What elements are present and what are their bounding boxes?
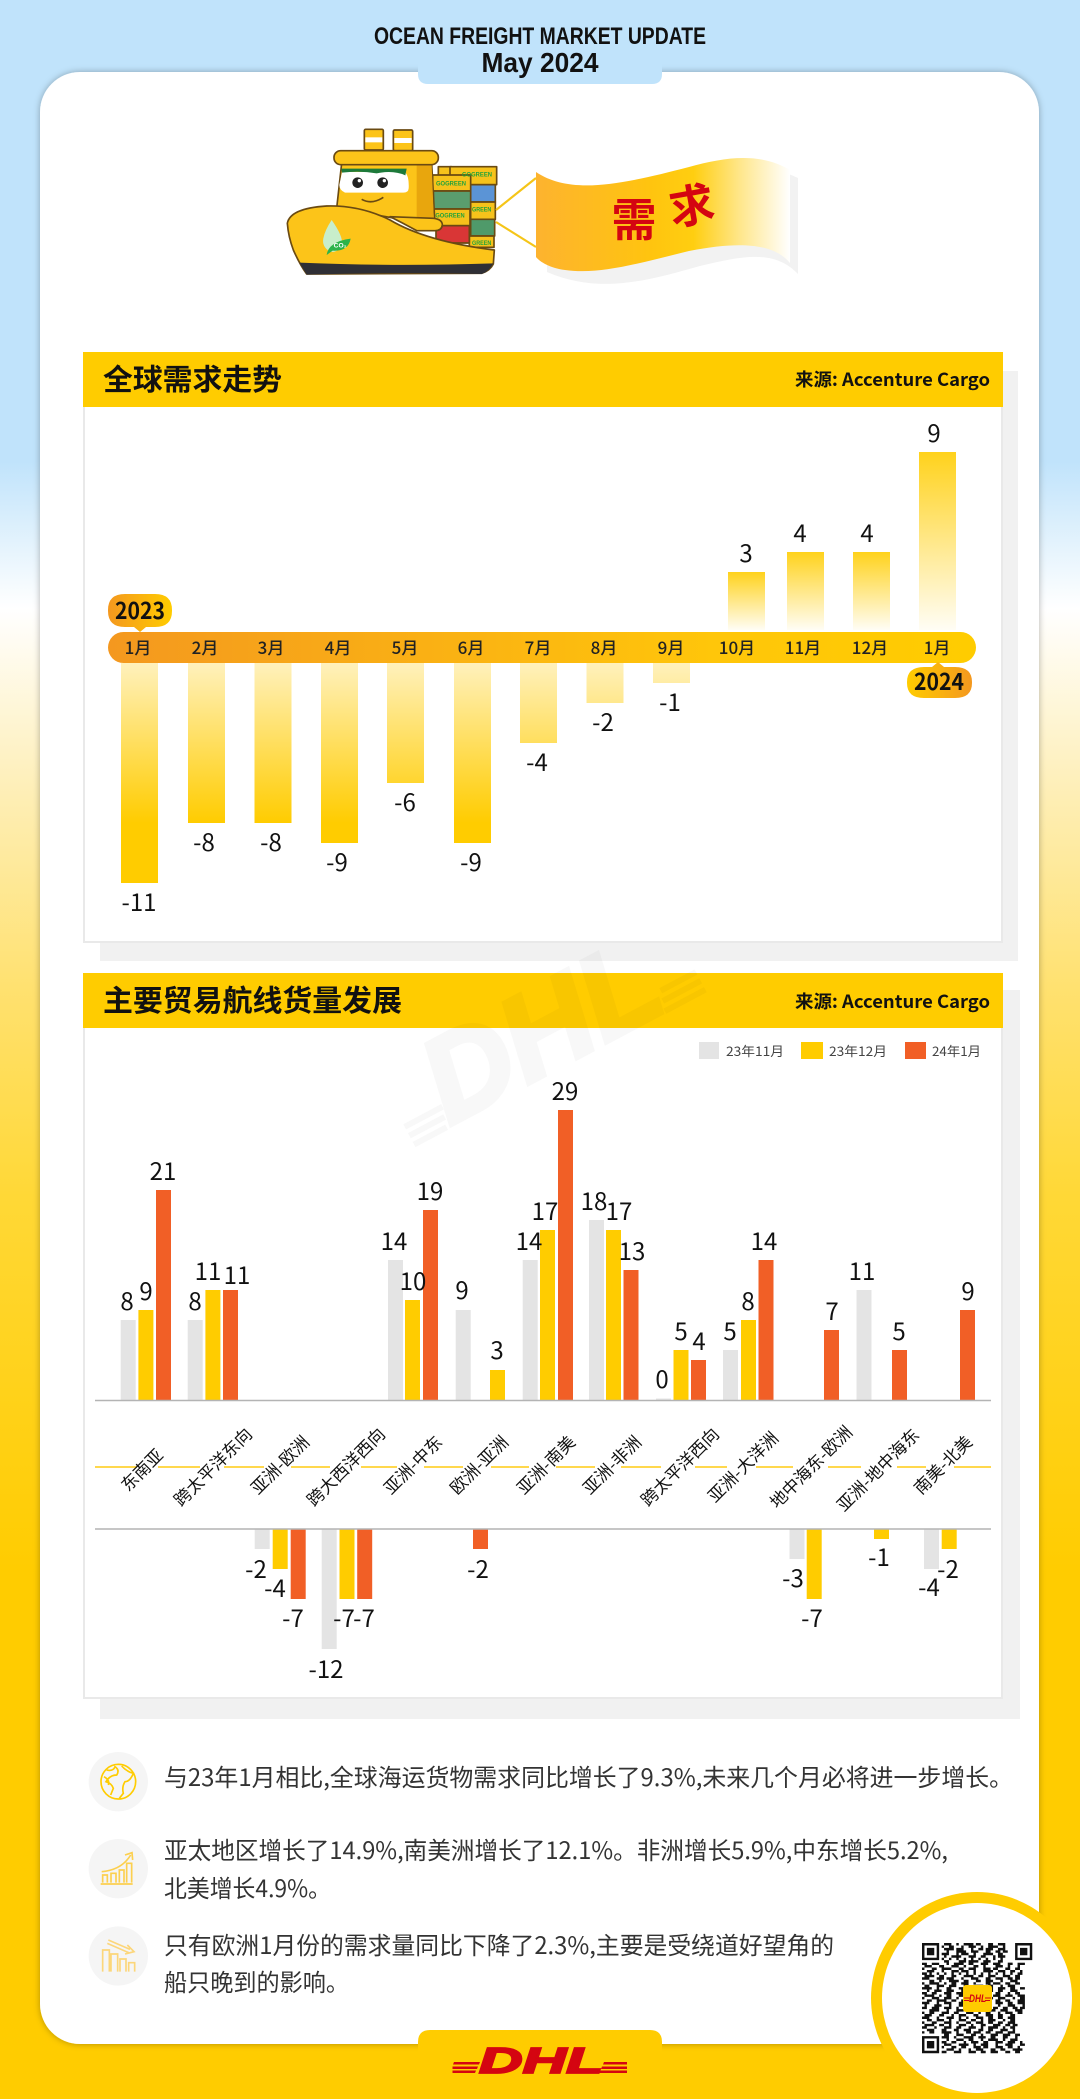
value labels: -2 bbox=[592, 703, 614, 738]
cargo containers: GOGREEN bbox=[462, 172, 492, 179]
pin: 2023: 2023 bbox=[115, 592, 165, 626]
month labels: 6月 bbox=[458, 634, 484, 659]
positive bars bbox=[728, 452, 956, 630]
QR code badge bbox=[871, 1892, 1080, 2099]
ship cabin bbox=[334, 151, 438, 225]
month labels: 10月 bbox=[719, 634, 755, 659]
QR centre logo bbox=[963, 1985, 992, 2012]
value labels: -6 bbox=[394, 783, 416, 818]
cargo containers: GREEN bbox=[472, 207, 491, 214]
value labels: -2 bbox=[937, 1550, 959, 1585]
panel header: 主要贸易航线货量发展 bbox=[103, 978, 402, 1020]
red bars: Jan 2024 bbox=[156, 1110, 975, 1599]
value labels: 9 bbox=[961, 1272, 975, 1307]
month labels: 4月 bbox=[325, 634, 351, 659]
banner text: 需 bbox=[611, 184, 657, 249]
panel header bbox=[83, 352, 1003, 407]
month labels bbox=[125, 634, 950, 659]
DHL logo bbox=[452, 2040, 627, 2081]
ship face bbox=[339, 169, 409, 202]
grey bars: Nov 2023 bbox=[121, 1220, 939, 1649]
panel shadow 1 bbox=[100, 371, 1018, 961]
value labels: 21 bbox=[150, 1152, 176, 1187]
value labels: 10 bbox=[400, 1262, 426, 1297]
value labels: -7 bbox=[353, 1599, 375, 1634]
title bbox=[374, 23, 706, 78]
axis lines bbox=[95, 1400, 991, 1529]
value labels: 11 bbox=[195, 1252, 221, 1287]
value labels: -8 bbox=[193, 823, 215, 858]
finder patterns bbox=[922, 1943, 1032, 2053]
value labels: -7 bbox=[801, 1599, 823, 1634]
panel: trade lane volume development bbox=[83, 894, 1003, 1698]
value labels: -8 bbox=[260, 823, 282, 858]
text block: key takeaways: 北美增长4.9%。 bbox=[164, 1869, 331, 1904]
panel: global demand trend bbox=[83, 352, 1003, 942]
value labels: -4 bbox=[526, 743, 548, 778]
value labels: 5 bbox=[892, 1312, 906, 1347]
category labels: 亚洲-欧洲 bbox=[244, 1429, 314, 1499]
value labels bbox=[120, 1072, 975, 1685]
category labels: 跨大西洋西向 bbox=[300, 1421, 390, 1511]
value labels: 3 bbox=[739, 534, 753, 569]
cargo containers: GOGREEN bbox=[436, 180, 466, 187]
value labels: 8 bbox=[120, 1282, 134, 1317]
legend: 24年1月 bbox=[932, 1041, 981, 1060]
value labels: 14 bbox=[381, 1222, 407, 1257]
value labels: -7 bbox=[333, 1599, 355, 1634]
panel header bbox=[83, 973, 1003, 1028]
text block: key takeaways bbox=[164, 1758, 1013, 1998]
value labels: 13 bbox=[619, 1232, 645, 1267]
text block: key takeaways: 只有欧洲1月份的需求量同比下降了2.3%,主要是受绕道好望角的 bbox=[164, 1926, 834, 1961]
QR code bbox=[922, 1943, 1032, 2053]
cargo containers: GREEN bbox=[472, 240, 491, 247]
value labels: 29 bbox=[552, 1072, 578, 1107]
month labels: 1月 bbox=[924, 634, 950, 659]
value labels: 0 bbox=[655, 1360, 669, 1395]
value labels: -7 bbox=[282, 1599, 304, 1634]
cargo containers bbox=[433, 167, 497, 247]
negative bars bbox=[121, 663, 690, 883]
value labels: 11 bbox=[849, 1252, 875, 1287]
value labels: 8 bbox=[741, 1282, 755, 1317]
month labels: 9月 bbox=[658, 634, 684, 659]
value labels: 5 bbox=[674, 1312, 688, 1347]
icon: rising chart bbox=[89, 1839, 148, 1898]
header tab bbox=[418, 60, 662, 84]
category labels: 亚洲-非洲 bbox=[576, 1429, 646, 1499]
value labels: -1 bbox=[659, 683, 681, 718]
category divider bbox=[95, 1466, 991, 1468]
category labels: 亚洲-中东 bbox=[377, 1429, 447, 1499]
legend: 23年11月 bbox=[726, 1041, 784, 1060]
value labels: 14 bbox=[516, 1222, 542, 1257]
month labels: 3月 bbox=[258, 634, 284, 659]
text block: key takeaways: 与23年1月相比,全球海运货物需求同比增长了9.3%,未来几个月必将进一步增长。 bbox=[164, 1758, 1013, 1793]
value labels: 8 bbox=[188, 1282, 202, 1317]
value labels: 17 bbox=[606, 1192, 632, 1227]
category labels bbox=[114, 1419, 977, 1516]
bar chart: trade lanes bbox=[95, 1072, 991, 1685]
value labels: 3 bbox=[490, 1331, 504, 1366]
month labels: 5月 bbox=[392, 634, 418, 659]
watermark: DHL bbox=[363, 894, 718, 1168]
watermark: DHL: DHL bbox=[399, 913, 682, 1149]
icon: falling chart bbox=[89, 1926, 148, 1986]
legend: 23年12月 bbox=[829, 1041, 887, 1060]
value labels: -3 bbox=[782, 1559, 804, 1594]
category labels: 亚洲-地中海东 bbox=[830, 1422, 924, 1516]
panel header: 全球需求走势 bbox=[103, 357, 282, 399]
value labels: 19 bbox=[417, 1172, 443, 1207]
QR centre logo: DHL bbox=[969, 1993, 986, 2005]
panel header: 来源: Accenture Cargo bbox=[795, 988, 990, 1014]
value labels: 4 bbox=[793, 514, 807, 549]
legend bbox=[699, 1041, 981, 1060]
panel shadow 2 bbox=[100, 990, 1020, 1719]
value labels: -4 bbox=[918, 1568, 940, 1603]
category labels: 亚洲-南美 bbox=[510, 1429, 580, 1499]
month labels: 8月 bbox=[591, 634, 617, 659]
banner: demand bbox=[536, 158, 798, 284]
ship hull bbox=[287, 206, 494, 275]
value labels: -9 bbox=[326, 843, 348, 878]
category labels: 南美-北美 bbox=[907, 1429, 977, 1499]
value labels: -4 bbox=[264, 1569, 286, 1604]
value labels: 14 bbox=[751, 1222, 777, 1257]
value labels: -9 bbox=[460, 843, 482, 878]
bar chart: demand trend bbox=[108, 414, 976, 918]
icon: CO2 drop bbox=[323, 220, 351, 255]
month labels: 2月 bbox=[192, 634, 218, 659]
pin: 2024: 2024 bbox=[914, 663, 964, 697]
value labels: 4 bbox=[692, 1322, 706, 1357]
value labels: -1 bbox=[868, 1538, 890, 1573]
icon: CO2 drop: CO₂ bbox=[334, 242, 347, 249]
value labels: 11 bbox=[224, 1256, 250, 1291]
illustration: container ship bbox=[287, 129, 497, 275]
value labels: 17 bbox=[532, 1192, 558, 1227]
value labels: 9 bbox=[455, 1271, 469, 1306]
footer tab bbox=[418, 2030, 662, 2060]
title: May 2024 bbox=[482, 47, 599, 78]
month labels: 7月 bbox=[525, 634, 551, 659]
value labels: -11 bbox=[122, 883, 156, 918]
banner tow ropes bbox=[496, 178, 536, 247]
text block: key takeaways: 船只晚到的影响。 bbox=[164, 1963, 349, 1998]
category labels: 东南亚 bbox=[114, 1442, 168, 1496]
value labels: 5 bbox=[723, 1312, 737, 1347]
ship funnels bbox=[364, 129, 413, 151]
DHL logo: DHL bbox=[479, 2040, 603, 2081]
value labels bbox=[122, 414, 941, 918]
category labels: 跨太平洋西向 bbox=[634, 1421, 724, 1511]
icon: globe bbox=[89, 1752, 148, 1811]
value labels: -2 bbox=[467, 1550, 489, 1585]
category labels: 地中海东-欧洲 bbox=[763, 1419, 857, 1513]
month labels: 12月 bbox=[852, 634, 888, 659]
value labels: 9 bbox=[927, 414, 941, 449]
text block: key takeaways: 亚太地区增长了14.9%,南美洲增长了12.1%。非洲增长5.9%,中东增长5.2%, bbox=[164, 1831, 948, 1866]
timeline bar bbox=[108, 632, 976, 663]
value labels: -12 bbox=[309, 1650, 343, 1685]
panel header: 来源: Accenture Cargo bbox=[795, 366, 990, 392]
banner text: 求 bbox=[663, 167, 719, 238]
value labels: -2 bbox=[245, 1550, 267, 1585]
value labels: 9 bbox=[139, 1272, 153, 1307]
banner text bbox=[611, 167, 719, 249]
yellow bars: Dec 2023 bbox=[138, 1230, 957, 1599]
category labels: 欧洲-亚洲 bbox=[443, 1429, 513, 1499]
month labels: 1月 bbox=[125, 634, 151, 659]
category labels: 亚洲-大洋洲 bbox=[701, 1425, 783, 1507]
value labels: 18 bbox=[581, 1182, 607, 1217]
value labels: 7 bbox=[825, 1292, 839, 1327]
cargo containers: GOGREEN bbox=[435, 212, 465, 219]
title: OCEAN FREIGHT MARKET UPDATE bbox=[374, 23, 706, 50]
category labels: 跨太平洋东向 bbox=[167, 1421, 257, 1511]
month labels: 11月 bbox=[785, 634, 821, 659]
value labels: 4 bbox=[860, 514, 874, 549]
